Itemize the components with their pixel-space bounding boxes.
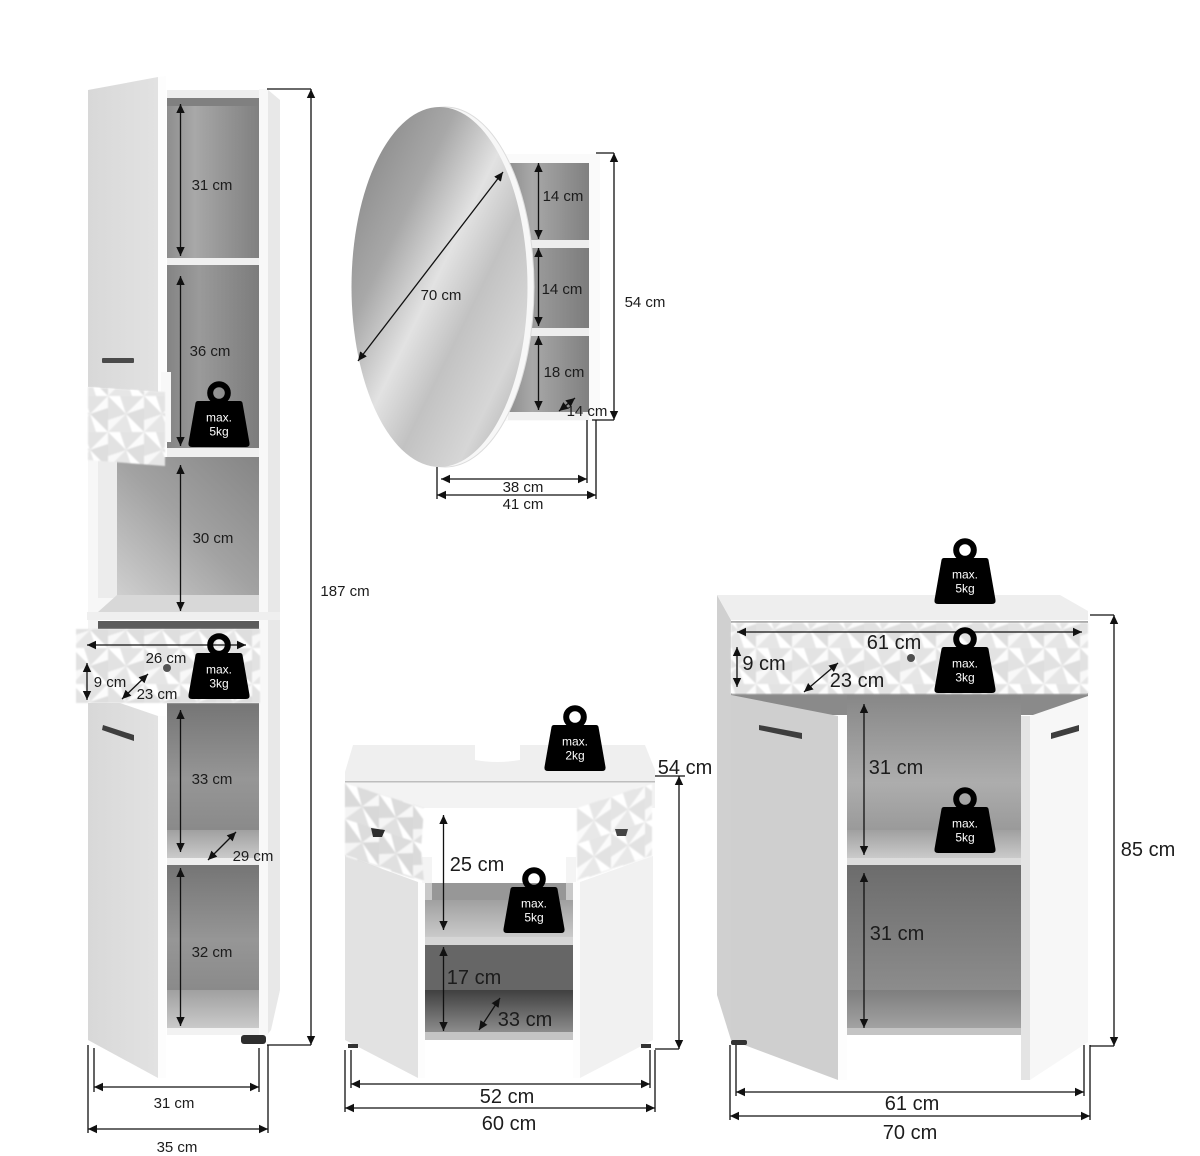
weight: max 2kg: 2kg xyxy=(565,748,585,762)
weight: max 2kg xyxy=(544,708,606,771)
weight: max 5kg xyxy=(188,384,250,447)
overall dimensions: 31 cm xyxy=(154,1095,194,1112)
dimension labels: 60 cm xyxy=(482,1113,536,1135)
right door xyxy=(1021,696,1088,1080)
overall dimensions: 187 cm xyxy=(320,583,370,600)
weight: max 2kg: max. xyxy=(562,734,588,748)
weight: max 5kg: 5kg xyxy=(955,582,975,596)
dimensions xyxy=(730,615,1114,1120)
handle xyxy=(102,358,134,363)
dimension labels: 38 cm xyxy=(503,479,543,496)
dimension labels: 25 cm xyxy=(450,854,504,876)
weight: max 3kg: max. xyxy=(206,662,232,676)
dimension labels: 33 cm xyxy=(192,771,232,788)
dimension labels xyxy=(447,757,712,1135)
handle xyxy=(371,828,385,837)
handle xyxy=(615,829,628,836)
dimension labels: 54 cm xyxy=(625,294,665,311)
weight: max 3kg xyxy=(188,636,250,699)
overall dimensions: 35 cm xyxy=(157,1139,197,1156)
dimensions xyxy=(345,776,685,1112)
dimension labels: 23 cm xyxy=(137,686,177,703)
left door xyxy=(731,695,847,1080)
dimension labels: 9 cm xyxy=(742,653,786,675)
dimension labels xyxy=(94,177,273,961)
dimensions xyxy=(358,153,614,499)
weight: max 3kg xyxy=(934,630,996,693)
dimension labels: 26 cm xyxy=(146,650,186,667)
dimension labels: 23 cm xyxy=(830,670,884,692)
decorative door panel xyxy=(88,387,165,466)
mirror cabinet xyxy=(352,107,665,513)
knob xyxy=(163,664,171,672)
sideboard xyxy=(717,541,1175,1144)
dimension labels: 52 cm xyxy=(480,1086,534,1108)
dimension labels: 30 cm xyxy=(193,530,233,547)
weight: max 5kg shelf: 5kg xyxy=(955,830,975,844)
weight: max 5kg shelf xyxy=(934,790,996,853)
weight: max 5kg: 5kg xyxy=(209,424,229,438)
weight: max 5kg shelf: max. xyxy=(952,816,978,830)
weight: max 3kg: 3kg xyxy=(209,676,229,690)
body xyxy=(717,595,1088,1040)
cabinet body xyxy=(505,154,600,421)
dimension labels: 70 cm xyxy=(421,287,461,304)
feet xyxy=(348,1044,651,1048)
interior xyxy=(345,782,655,1040)
dimension labels: 41 cm xyxy=(503,496,543,513)
dimension labels: 14 cm xyxy=(567,403,607,420)
drawer xyxy=(76,629,260,703)
tall cabinet xyxy=(76,76,370,1156)
mirror door xyxy=(352,107,534,467)
weight: max 5kg: max. xyxy=(206,410,232,424)
weight: max 5kg: max. xyxy=(521,896,547,910)
height dimensions xyxy=(87,104,246,1026)
upper door xyxy=(88,76,171,442)
cabinet body xyxy=(87,89,280,1044)
weight: max 5kg xyxy=(934,541,996,604)
weight: max 3kg: max. xyxy=(952,656,978,670)
dimension labels: 36 cm xyxy=(190,343,230,360)
left door xyxy=(345,783,425,1078)
weight: max 5kg xyxy=(503,870,565,933)
dimension labels: 31 cm xyxy=(869,757,923,779)
dimension labels xyxy=(742,632,1175,1144)
dimension labels: 31 cm xyxy=(870,923,924,945)
weight: max 3kg: 3kg xyxy=(955,670,975,684)
overall dimensions xyxy=(88,89,370,1156)
dimension labels: 18 cm xyxy=(544,364,584,381)
dimension labels: 61 cm xyxy=(885,1093,939,1115)
handle xyxy=(1051,725,1079,739)
dimension labels: 14 cm xyxy=(543,188,583,205)
dimension labels: 33 cm xyxy=(498,1009,552,1031)
dimension labels: 31 cm xyxy=(192,177,232,194)
dimension labels: 54 cm xyxy=(658,757,712,779)
foot xyxy=(731,1040,747,1045)
dimension labels: 61 cm xyxy=(867,632,921,654)
weight: max 5kg: max. xyxy=(952,568,978,582)
dimension labels: 17 cm xyxy=(447,967,501,989)
top panel xyxy=(345,745,655,782)
vanity unit xyxy=(345,708,712,1135)
dimension labels xyxy=(421,188,665,513)
dimension labels: 32 cm xyxy=(192,944,232,961)
right door xyxy=(573,783,653,1078)
lower door xyxy=(88,703,166,1078)
handle xyxy=(759,725,802,739)
drawer xyxy=(731,621,1088,694)
dimension labels: 9 cm xyxy=(94,674,126,691)
handle xyxy=(102,725,134,741)
top panel xyxy=(717,595,1088,620)
dimension labels: 85 cm xyxy=(1121,839,1175,861)
weight: max 5kg: 5kg xyxy=(524,910,544,924)
dimension labels: 14 cm xyxy=(542,281,582,298)
dimension labels: 29 cm xyxy=(233,848,273,865)
dimension labels: 70 cm xyxy=(883,1122,937,1144)
knob xyxy=(907,654,915,662)
